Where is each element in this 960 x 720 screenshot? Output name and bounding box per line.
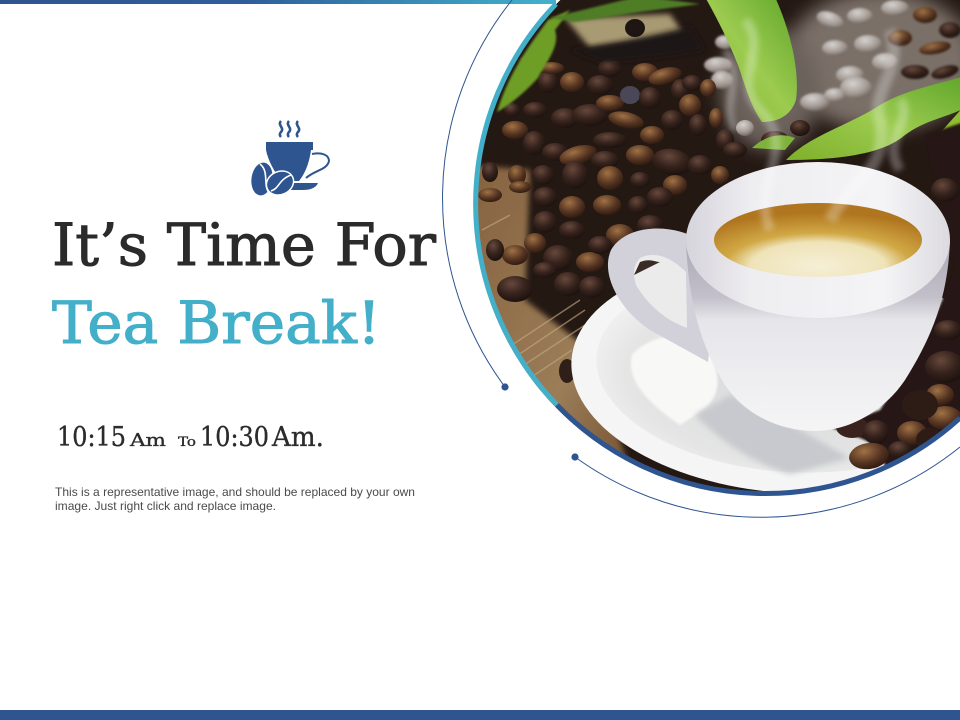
- bean on saucer: [849, 442, 889, 470]
- outer thin arc with dots: [443, 0, 960, 517]
- note text: [55, 485, 415, 513]
- top bar: [0, 0, 556, 4]
- dark shade near top: [570, 26, 705, 62]
- photo ring: [476, 4, 960, 494]
- title line 2: Tea Break!: [52, 289, 381, 357]
- blurred top background: [565, 14, 685, 48]
- note text: image. Just right click and replace image.: [55, 499, 276, 513]
- time range: 10:15: [57, 422, 126, 453]
- photo background: [470, 0, 960, 500]
- photo: coffee cup and beans in circle: [470, 0, 960, 508]
- cup rim: [686, 162, 950, 318]
- leaf: left: [497, 10, 570, 112]
- wooden table: [478, 162, 629, 457]
- icon: coffee cup with beans: [249, 121, 329, 199]
- saucer: [571, 294, 944, 491]
- title line 1: It’s Time For: [52, 211, 436, 279]
- cup handle: [608, 229, 715, 362]
- time range: Am.: [271, 422, 324, 453]
- roasted beans pile: [478, 19, 810, 383]
- leaf: centre top: [705, 0, 797, 122]
- blurred grey beans: [704, 0, 960, 111]
- time range: 10:30: [200, 422, 269, 453]
- bottom bar: [0, 710, 960, 720]
- coffee surface: [714, 203, 922, 277]
- cup body: [686, 240, 950, 431]
- note text: This is a representative image, and should be replaced by your own: [55, 485, 415, 499]
- time range: To: [178, 435, 196, 450]
- leaf: right: [786, 76, 960, 160]
- steam: [725, 20, 904, 230]
- time range: [57, 422, 324, 453]
- beans: right side: [832, 120, 960, 490]
- time range: Am: [129, 430, 166, 451]
